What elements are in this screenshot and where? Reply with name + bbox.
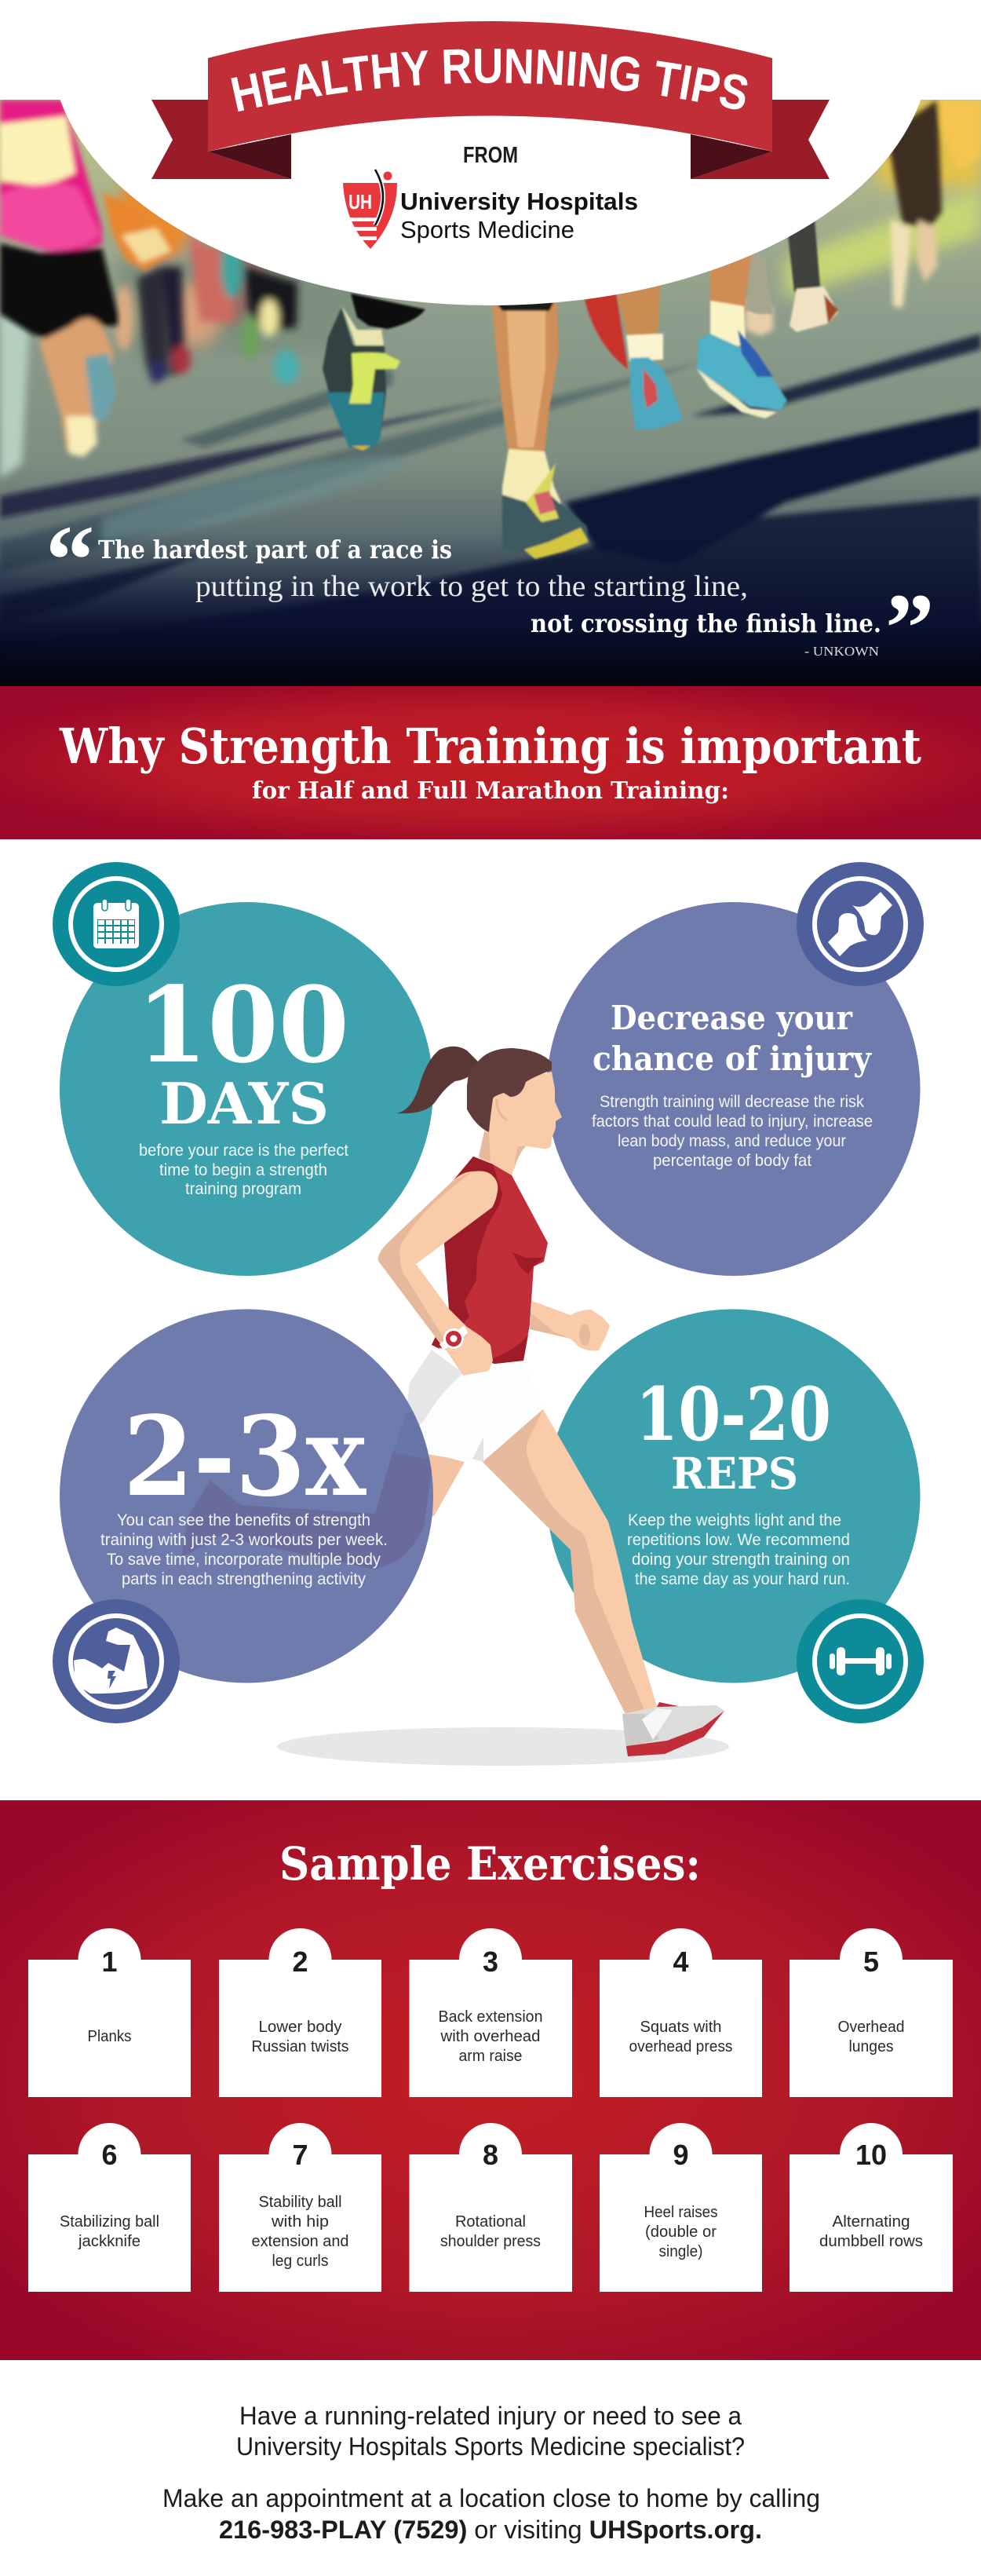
card 7: extension and <box>251 2233 348 2250</box>
card 8 <box>410 2123 572 2292</box>
card 4: Squats with <box>640 2019 722 2036</box>
card 8: 8 <box>483 2139 498 2171</box>
footer call to action: Make an appointment at a location close to home by calling <box>162 2484 820 2512</box>
grey legging runner <box>787 220 820 292</box>
ponytail <box>396 1047 478 1113</box>
panel: decrease injury <box>546 862 924 1276</box>
card 1: Planks <box>88 2028 132 2045</box>
heading: Decrease your <box>611 999 853 1037</box>
knee and black shorts leg <box>351 294 425 329</box>
card 9 <box>600 2123 762 2292</box>
centre shoe <box>502 491 589 559</box>
left runner: knee and legs <box>39 318 114 451</box>
card 5: Overhead <box>838 2019 904 2036</box>
icon: joint <box>797 862 924 986</box>
back runners legs <box>137 267 169 385</box>
description: You can see the benefits of strength <box>117 1511 370 1529</box>
card 4: 4 <box>673 1946 689 1978</box>
front leg <box>483 1409 658 1714</box>
big number: 100 <box>137 964 349 1087</box>
footer call to action: Have a running-related injury or need to see a <box>239 2402 742 2430</box>
hero photo: runners on road <box>0 100 981 686</box>
panel: 2-3x: training with just 2-3 workouts per week. <box>100 1531 388 1549</box>
logo: University Hospitals Sports Medicine: Sports Medicine <box>400 216 574 243</box>
red shoe runner <box>585 292 628 369</box>
logo: University Hospitals Sports Medicine <box>343 170 638 249</box>
shoe <box>622 1702 724 1756</box>
blue shoe 4 <box>697 334 787 410</box>
neck and face <box>479 1072 562 1175</box>
heading: Sample Exercises: <box>279 1837 701 1891</box>
panel: 100 days: DAYS <box>159 1070 329 1137</box>
panel: decrease injury: lean body mass, and reduce your <box>618 1132 846 1150</box>
card 6 <box>28 2123 191 2292</box>
card 1: 1 <box>101 1946 118 1978</box>
watch <box>432 1325 468 1350</box>
card 6: Stabilizing ball <box>60 2213 159 2231</box>
card 9: 9 <box>673 2139 689 2171</box>
left runner: race bib <box>0 116 75 185</box>
footer call to action: 216-983-PLAY (7529) or visiting UHSports.org. <box>219 2516 762 2544</box>
card 10 <box>790 2123 953 2292</box>
white header ellipse <box>51 0 930 305</box>
card 6: 6 <box>101 2139 118 2171</box>
blue shoe 3 <box>630 357 683 430</box>
icon: UH shield <box>343 170 397 249</box>
panel: 2-3x: parts in each strengthening activity <box>122 1570 366 1588</box>
card 7: Stability ball <box>259 2194 342 2211</box>
panel: 10-20 reps: REPS <box>671 1448 798 1499</box>
far left leg <box>0 310 30 479</box>
red top <box>432 1156 548 1364</box>
attribution: - UNKOWN <box>804 644 879 659</box>
panel: 10-20 reps: doing your strength training on <box>632 1551 850 1569</box>
runner illustration <box>378 1047 724 1756</box>
faint road marking <box>102 455 412 542</box>
icon: dumbbell <box>797 1599 924 1723</box>
card 8: shoulder press <box>440 2233 541 2250</box>
ribbon folds <box>208 134 291 179</box>
panel: 100 days: time to begin a strength <box>159 1161 327 1179</box>
card 7: leg curls <box>272 2253 328 2270</box>
card 5 <box>790 1928 953 2097</box>
title: HEALTHY RUNNING TIPS <box>231 49 747 111</box>
footer call to action: University Hospitals Sports Medicine specialist? <box>236 2432 745 2461</box>
ground shadow <box>277 1727 729 1766</box>
centre sock <box>501 448 562 506</box>
card 8: Rotational <box>455 2213 526 2231</box>
card 4: overhead press <box>629 2038 733 2055</box>
opening quote mark: “ <box>46 506 94 615</box>
left ribbon tail <box>151 100 291 179</box>
front arm <box>530 1301 610 1350</box>
card 5: lunges <box>849 2038 893 2055</box>
ribbon banner <box>151 21 830 179</box>
panel: 2-3x: To save time, incorporate multiple body <box>107 1551 381 1569</box>
left runner: black shorts <box>0 243 118 345</box>
skin leg runner with blue shoe <box>709 254 752 316</box>
orange runner <box>102 192 179 271</box>
bent arm <box>378 1171 498 1376</box>
card 2 <box>219 1928 381 2097</box>
card 10: dumbbell rows <box>819 2233 923 2250</box>
card 7 <box>219 2123 381 2292</box>
card 1 <box>28 1928 191 2097</box>
card 10: Alternating <box>832 2213 910 2231</box>
quote: not crossing the finish line. <box>531 608 881 638</box>
card 9: (double or <box>645 2223 717 2241</box>
right side far legs <box>887 100 942 228</box>
closing quote mark: ” <box>885 575 934 683</box>
card 5: 5 <box>863 1946 879 1978</box>
card 10: 10 <box>855 2139 887 2171</box>
runner shorts and back leg seen through circle <box>181 1409 433 1569</box>
quote lines: The hardest part of a race is <box>98 535 452 565</box>
panel: 10-20 reps: repetitions low. We recommend <box>627 1531 850 1549</box>
right ribbon tail <box>691 100 830 179</box>
description: before your race is the perfect <box>139 1142 348 1160</box>
card 7: with hip <box>271 2213 329 2231</box>
left runner: shirt <box>0 100 102 251</box>
footer call to action <box>162 2402 820 2544</box>
icon: calendar <box>53 862 180 986</box>
icon: UH shield: UH <box>348 190 372 214</box>
quote <box>46 506 934 683</box>
card 9: Heel raises <box>644 2204 717 2221</box>
icon: flexed arm <box>53 1599 180 1723</box>
card 2: 2 <box>292 1946 308 1978</box>
card 3: 3 <box>483 1946 498 1978</box>
card 3 <box>410 1928 572 2097</box>
road shadows <box>0 331 981 619</box>
panel: 100 days <box>53 862 433 1276</box>
centre bare leg <box>491 302 559 451</box>
panel: decrease injury: chance of injury <box>593 1040 872 1078</box>
panel: decrease injury: factors that could lead to injury, increase <box>592 1113 873 1131</box>
card 2: Lower body <box>259 2019 342 2036</box>
panel: decrease injury: percentage of body fat <box>653 1152 811 1170</box>
black and green shoe <box>323 308 386 451</box>
panel: 100 days: training program <box>185 1180 301 1198</box>
runner back thigh <box>424 1452 465 1519</box>
quote: putting in the work to get to the starting line, <box>195 570 748 603</box>
card 7: 7 <box>292 2139 308 2171</box>
hair <box>467 1048 552 1132</box>
panel: sample exercises <box>0 1800 981 2360</box>
panel: 10-20 reps: the same day as your hard run. <box>635 1570 850 1588</box>
card 3: with overhead <box>439 2028 540 2045</box>
ribbon main <box>208 21 772 152</box>
panel: 10-20 reps <box>546 1310 924 1723</box>
cream foot of far runner <box>745 298 773 336</box>
from label: FROM <box>463 143 518 168</box>
card 9: single) <box>659 2243 703 2260</box>
card 2: Russian twists <box>251 2038 348 2055</box>
card 3: Back extension <box>438 2008 543 2026</box>
description: Strength training will decrease the risk <box>600 1093 864 1111</box>
big number: 2-3x <box>123 1393 367 1522</box>
runner shorts <box>399 1350 543 1462</box>
card 3: arm raise <box>458 2048 523 2065</box>
logo wordmark: University Hospitals <box>400 188 638 215</box>
panel: 2-3x <box>53 1310 433 1723</box>
subheading: for Half and Full Marathon Training: <box>252 777 729 805</box>
card 4 <box>600 1928 762 2097</box>
card 6: jackknife <box>78 2233 140 2250</box>
big number: 10-20 <box>636 1372 831 1458</box>
description: Keep the weights light and the <box>628 1511 841 1529</box>
panel: why strength training banner <box>0 686 981 839</box>
